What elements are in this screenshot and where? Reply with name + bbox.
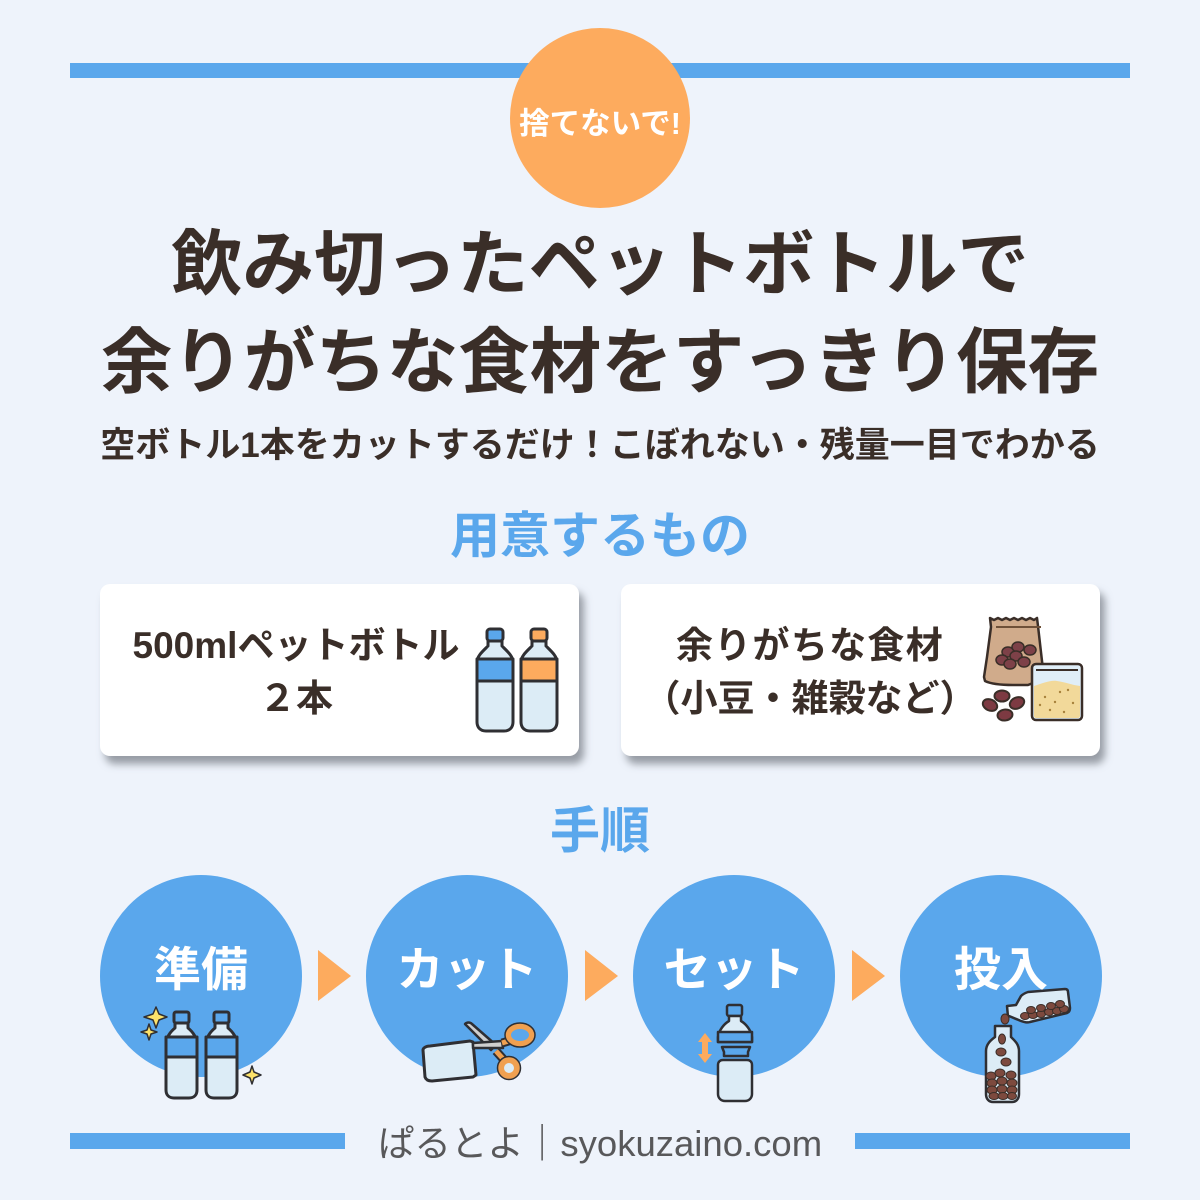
footer credit: ぱるとよ｜syokuzaino.com [378, 1123, 822, 1164]
title: 余りがちな食材をすっきり保存 [101, 323, 1099, 403]
card text: ２本 [259, 678, 333, 719]
card text: （小豆・雑穀など） [644, 678, 976, 719]
icon: two bottles [476, 628, 558, 732]
top rule [70, 63, 1130, 78]
badge: 捨てないで! [510, 28, 690, 208]
step 3 label: セット [664, 943, 804, 996]
arrow 1 [318, 950, 351, 1001]
step 1: 準備 [100, 875, 302, 1077]
title [101, 225, 1099, 403]
icon: bag and jar of beans [982, 616, 1084, 722]
step 2: カット [366, 875, 568, 1077]
card text: 500mlペットボトル [133, 625, 459, 666]
heading: 手順: 手順 [550, 803, 650, 859]
footer rule left [70, 1133, 345, 1149]
badge: 捨てないで!: 捨てないで! [519, 107, 681, 141]
step 4 label: 投入 [954, 943, 1048, 996]
heading: 用意するもの: 用意するもの [450, 508, 750, 564]
step 4: 投入 [900, 875, 1102, 1077]
subtitle: 空ボトル1本をカットするだけ！こぼれない・残量一目でわかる [100, 426, 1100, 465]
card text: 余りがちな食材 [676, 625, 944, 666]
arrow 2 [585, 950, 618, 1001]
step 2 label: カット [396, 943, 538, 996]
step 1 label: 準備 [154, 943, 248, 996]
arrow 3 [852, 950, 885, 1001]
card text [644, 625, 976, 719]
card text [133, 625, 459, 719]
card: ペットボトル [100, 584, 579, 756]
step 3: セット [633, 875, 835, 1077]
footer rule right [855, 1133, 1130, 1149]
title: 飲み切ったペットボトルで [171, 225, 1029, 305]
card: 食材 [621, 584, 1100, 756]
